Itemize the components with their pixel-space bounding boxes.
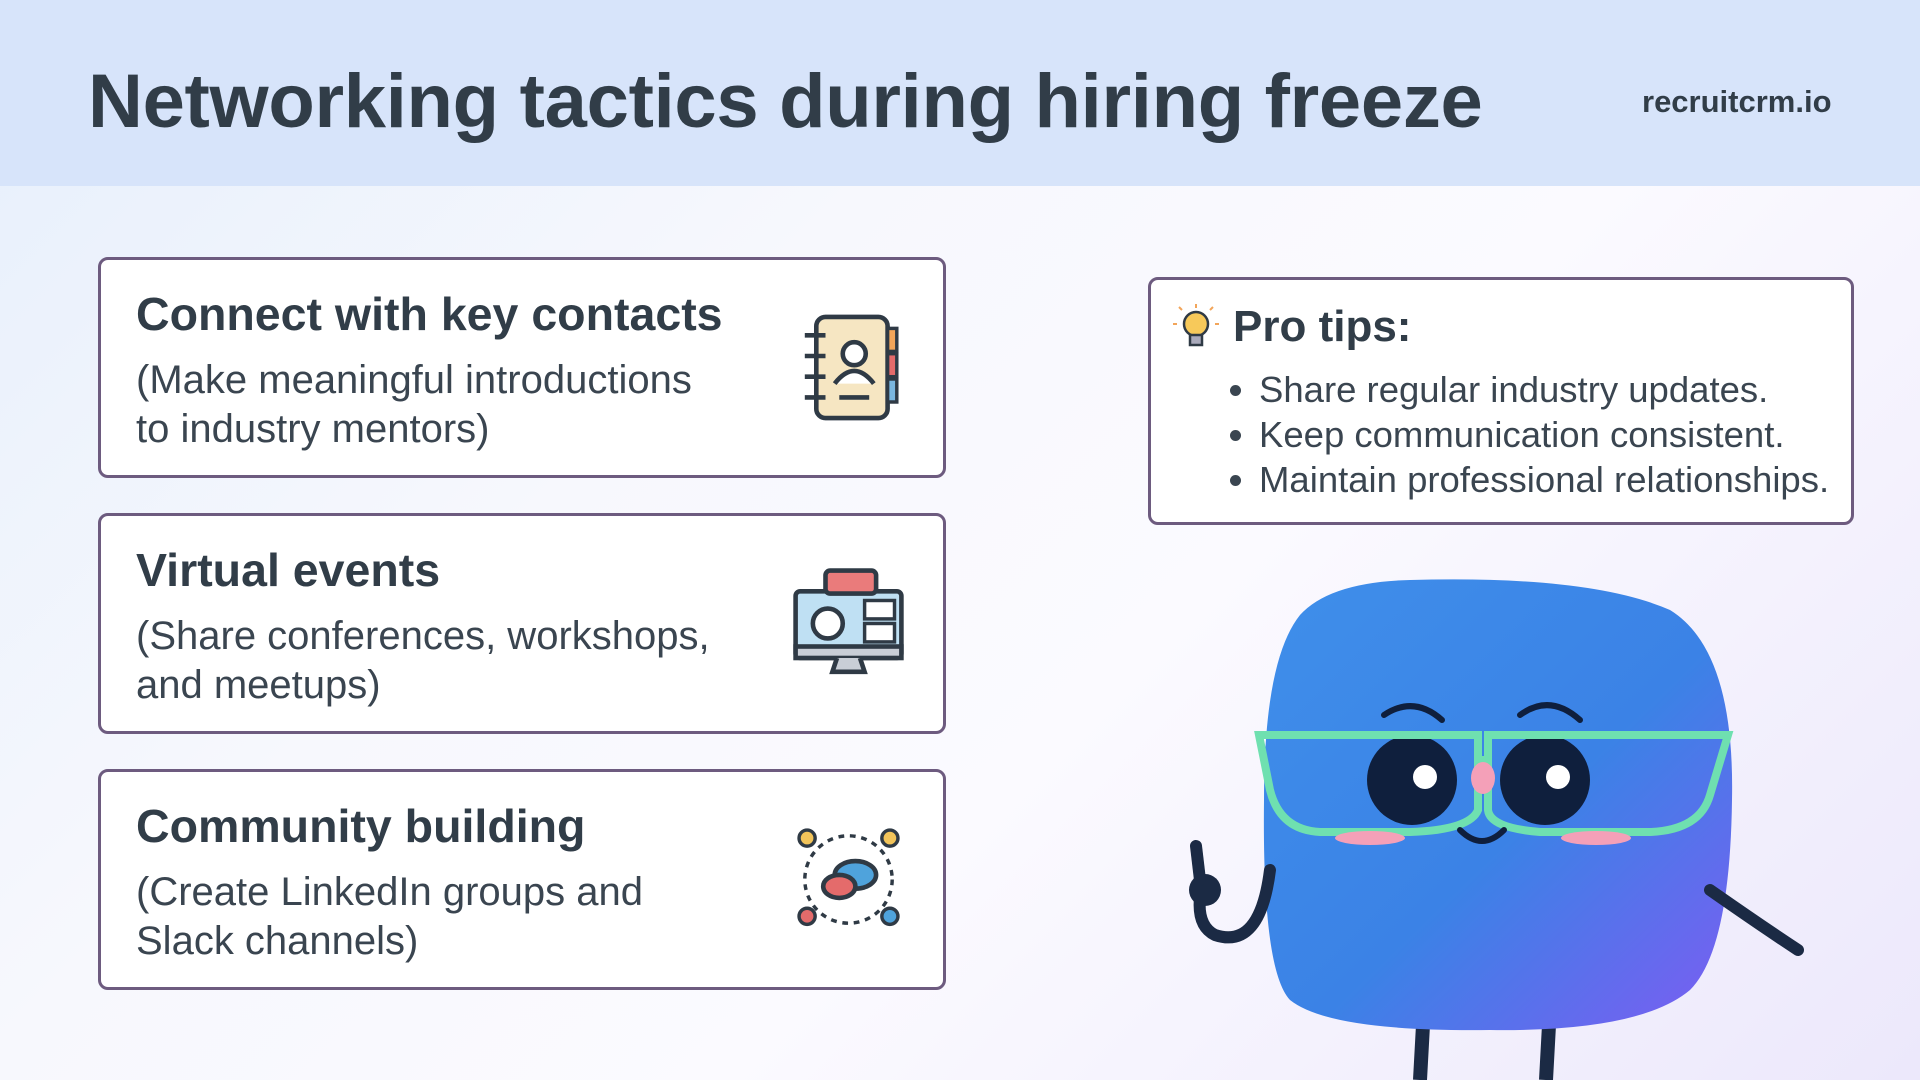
tips list: Keep communication consistent. — [1259, 414, 1784, 455]
title: Networking tactics during hiring freeze — [88, 59, 1483, 144]
icon: light bulb — [1173, 304, 1219, 346]
tips list — [1230, 369, 1829, 500]
text — [136, 614, 710, 707]
panel: connect with key contacts — [98, 257, 946, 478]
tips list: Share regular industry updates. — [1259, 369, 1768, 410]
heading: Virtual events — [136, 544, 440, 596]
tips list: Maintain professional relationships. — [1259, 459, 1829, 500]
mascot — [1189, 579, 1804, 1080]
text: and meetups) — [136, 663, 381, 707]
panel: virtual events — [98, 513, 946, 734]
panel: community building — [98, 769, 946, 990]
header band — [0, 0, 1920, 186]
text: Slack channels) — [136, 919, 418, 963]
icon: contact book — [804, 314, 899, 420]
brand: recruitcrm.io — [1642, 84, 1832, 119]
text — [136, 870, 643, 963]
heading: Pro tips: — [1233, 302, 1411, 351]
text — [136, 358, 692, 451]
text: (Create LinkedIn groups and — [136, 870, 643, 914]
text: (Make meaningful introductions — [136, 358, 692, 402]
icon: community — [797, 828, 900, 926]
panel: pro tips — [1148, 277, 1854, 525]
text: to industry mentors) — [136, 407, 489, 451]
icon: monitor — [793, 568, 904, 674]
text: (Share conferences, workshops, — [136, 614, 710, 658]
heading: Connect with key contacts — [136, 288, 723, 340]
heading: Community building — [136, 800, 585, 852]
